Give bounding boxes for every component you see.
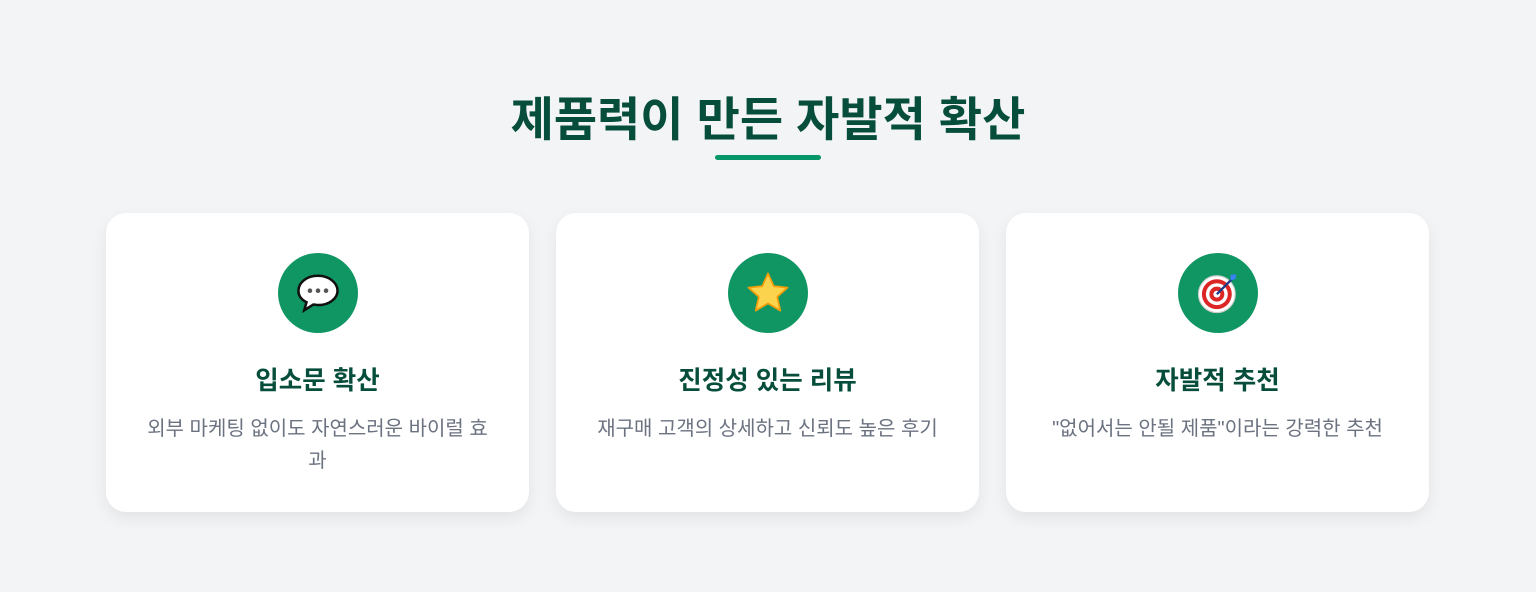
- description: [147, 418, 488, 472]
- title underline: [715, 155, 821, 160]
- description: "없어서는 안될 제품"이라는 강력한 추천: [1052, 418, 1383, 440]
- card: recommendation: [1006, 213, 1429, 512]
- heading: 입소문 확산: [255, 367, 380, 395]
- card: word of mouth: [106, 213, 529, 512]
- heading: 자발적 추천: [1155, 367, 1280, 395]
- icon: speech bubble: [278, 253, 358, 333]
- card: reviews: [556, 213, 979, 512]
- icon: star: [728, 253, 808, 333]
- description: 외부 마케팅 없이도 자연스러운 바이럴 효: [147, 418, 488, 440]
- description: 재구매 고객의 상세하고 신뢰도 높은 후기: [597, 418, 938, 440]
- title: 제품력이 만든 자발적 확산: [511, 93, 1025, 146]
- description: 과: [308, 450, 327, 472]
- icon: target: [1178, 253, 1258, 333]
- heading: 진정성 있는 리뷰: [678, 367, 857, 395]
